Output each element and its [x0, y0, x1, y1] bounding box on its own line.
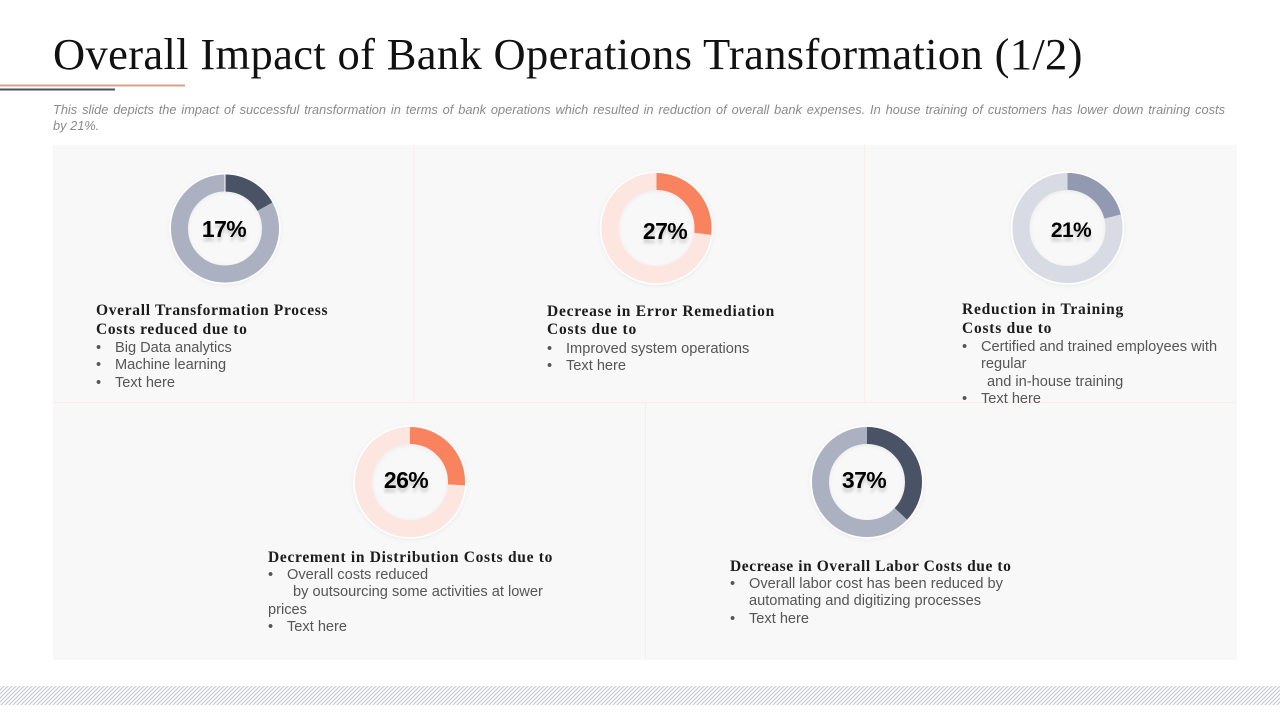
bullet list: automating and digitizing processes	[749, 593, 981, 609]
panel: labor costs	[730, 427, 1012, 626]
bullet list: •	[96, 340, 101, 356]
donut value: 17%	[202, 216, 246, 242]
bullet list: Text here	[981, 391, 1041, 407]
panel: error remediation	[547, 173, 775, 374]
panel: distribution costs	[268, 427, 553, 635]
bullet list: Text here	[749, 610, 809, 626]
donut value: 26%	[384, 467, 428, 493]
bullet list: Overall labor cost has been reduced by	[749, 576, 1003, 592]
description text	[53, 102, 1225, 133]
description text: by 21%.	[53, 118, 99, 133]
bullet list: Improved system operations	[566, 340, 749, 356]
card heading: Costs reduced due to	[96, 320, 248, 338]
bullet list: Certified and trained employees with	[981, 338, 1217, 354]
bullet list	[268, 566, 543, 635]
bullet list: •	[962, 391, 967, 407]
card heading: Decrement in Distribution Costs due to	[268, 548, 553, 566]
donut value: 37%	[842, 467, 886, 493]
card heading	[547, 302, 775, 338]
bullet list: Overall costs reduced	[287, 566, 428, 582]
bullet list: regular	[981, 356, 1026, 372]
bullet list: •	[547, 358, 552, 374]
panel background grid	[53, 145, 1237, 660]
bullet list: and in-house training	[987, 374, 1123, 390]
bullet list	[96, 340, 232, 390]
card heading: Costs due to	[547, 321, 637, 338]
bullet list: •	[268, 566, 273, 582]
donut chart: 17%	[171, 174, 279, 282]
bullet list	[730, 576, 1003, 626]
donut chart: 26%	[355, 427, 465, 539]
bullet list: Big Data analytics	[115, 340, 232, 356]
bullet list: •	[96, 357, 101, 373]
bullet list: •	[962, 338, 967, 354]
bullet list: •	[730, 610, 735, 626]
bullet list: by outsourcing some activities at lower	[293, 584, 543, 600]
panel: overall transformation process	[96, 174, 328, 390]
bullet list: •	[547, 340, 552, 356]
card heading: Overall Transformation Process	[96, 302, 328, 319]
donut chart: 27%	[602, 173, 712, 285]
bullet list: •	[268, 619, 273, 635]
donut value: 27%	[643, 218, 687, 244]
bullet list	[962, 338, 1217, 407]
bullet list: Machine learning	[115, 357, 226, 373]
bullet list: Text here	[115, 374, 175, 390]
donut chart: 21%	[1012, 173, 1122, 285]
card heading: Reduction in Training	[962, 301, 1124, 318]
card heading	[962, 301, 1124, 336]
donut chart: 37%	[812, 427, 922, 539]
card heading: Decrease in Overall Labor Costs due to	[730, 558, 1012, 574]
card heading	[96, 302, 328, 338]
bullet list	[547, 340, 749, 374]
bullet list: •	[730, 576, 735, 592]
bullet list: prices	[268, 602, 307, 618]
bullet list: Text here	[287, 619, 347, 635]
title: Overall Impact of Bank Operations Transformation (1/2)	[53, 29, 1083, 79]
panel: training costs	[962, 173, 1217, 407]
card heading: Decrease in Error Remediation	[547, 302, 775, 320]
hatched footer band	[0, 686, 1280, 705]
donut value: 21%	[1051, 219, 1091, 242]
title underline accent	[0, 84, 185, 90]
description text: This slide depicts the impact of successful transformation in terms of bank operations which resulted in reduction of overall bank expenses. In house training of customers has lower down training costs	[53, 102, 1225, 117]
bullet list: •	[96, 374, 101, 390]
bullet list: Text here	[566, 358, 626, 374]
card heading: Costs due to	[962, 320, 1052, 336]
